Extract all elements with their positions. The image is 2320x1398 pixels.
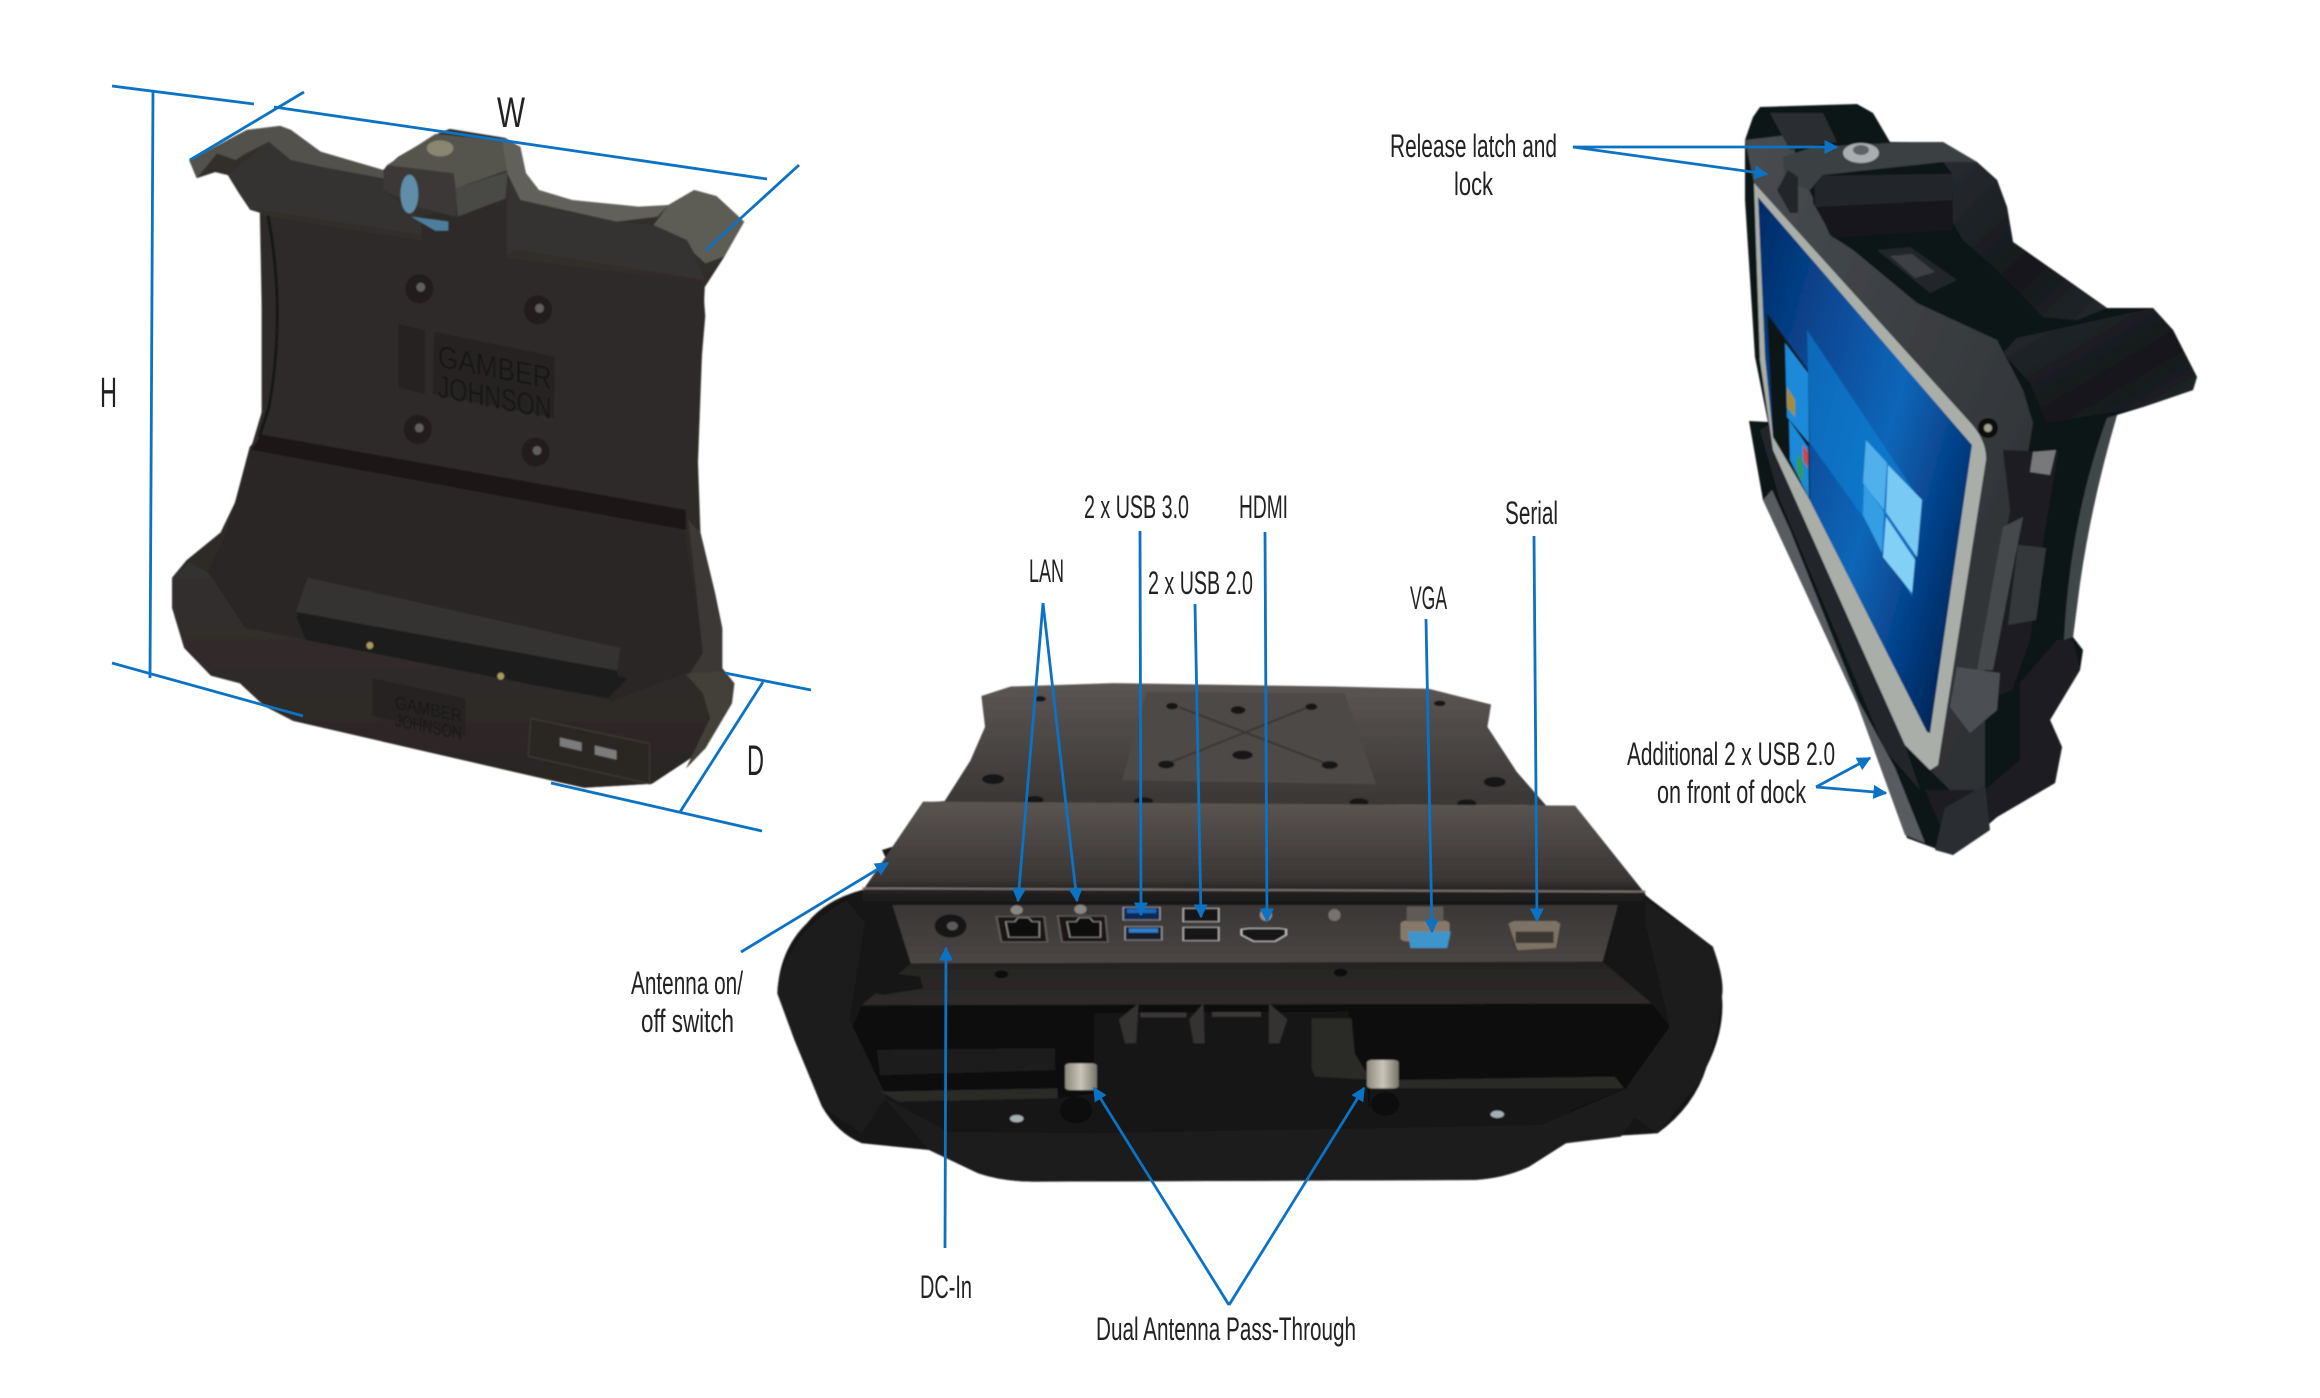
blue latch blade — [411, 217, 448, 231]
depth line — [680, 682, 763, 812]
center block side — [1312, 1018, 1367, 1079]
mounting screw highlight — [533, 446, 541, 455]
release latch text line 1: Release latch and — [1390, 128, 1557, 164]
lower front body — [883, 1088, 1639, 1182]
light beam — [1807, 330, 1920, 597]
HDMI port — [1241, 928, 1286, 941]
USB 3.0 text: 2 x USB 3.0 — [1084, 489, 1189, 525]
start tile photo — [1787, 387, 1795, 417]
rail inner — [1760, 425, 1920, 790]
back plate — [252, 216, 705, 515]
USB 3.0 bottom — [1125, 927, 1162, 940]
lower back wall — [208, 450, 703, 688]
tablet frame — [1745, 135, 2033, 790]
callout: antenna switch — [631, 863, 888, 1039]
corner screw core — [1984, 424, 1992, 432]
right grip — [2003, 308, 2197, 423]
side catch — [2008, 545, 2046, 625]
hinge latch — [1950, 667, 2000, 733]
corner screw — [1978, 418, 1998, 438]
release latch arrow 2 — [1573, 147, 1767, 174]
antenna switch text line 2: off switch — [641, 1003, 734, 1039]
keyboard latch label — [1890, 254, 1935, 278]
dimension label D: D — [747, 737, 764, 785]
tray interior — [853, 1004, 1670, 1113]
LAN jack 1 — [1006, 918, 1039, 937]
VESA hole — [1166, 703, 1178, 710]
mount hole top — [1034, 696, 1046, 702]
LAN jack 2 — [1067, 918, 1101, 937]
latch block top — [1783, 142, 1977, 190]
mounting screw highlight — [415, 423, 424, 432]
VGA connector — [1408, 932, 1451, 948]
right bay — [1370, 1088, 1624, 1123]
mounting screw highlight — [416, 283, 425, 292]
center antenna block — [1093, 1012, 1370, 1132]
connector notch — [1119, 1003, 1139, 1043]
logo line 1: GAMBER — [438, 338, 552, 396]
left tab surface — [189, 126, 384, 178]
USB 2.0 top — [1183, 908, 1219, 922]
keyboard latch — [1877, 247, 1957, 293]
left step — [880, 1088, 1058, 1102]
callout: Serial — [1505, 495, 1558, 921]
lock side face — [456, 172, 507, 217]
right post surface — [502, 138, 668, 222]
width line — [274, 107, 767, 179]
mounting screw — [522, 437, 550, 467]
front USB text line 2: on front of dock — [1657, 774, 1807, 810]
LAN arrow 2 — [1043, 603, 1077, 901]
VESA hole — [1322, 761, 1338, 769]
VGA glow — [1407, 907, 1443, 921]
LAN screw 1 — [1011, 905, 1023, 915]
plate groove — [259, 216, 277, 437]
left lobe shade — [777, 900, 886, 1133]
callout: USB 2.0 — [1148, 565, 1253, 917]
VGA text: VGA — [1410, 580, 1447, 616]
serial connector — [1508, 921, 1561, 951]
antenna connector left — [1065, 1063, 1097, 1090]
handle — [1943, 162, 2107, 320]
mounting screw — [524, 295, 552, 324]
lock front face — [384, 165, 458, 217]
screw right — [1491, 1111, 1504, 1118]
VGA arrow — [1426, 619, 1432, 932]
VESA plate — [1122, 692, 1376, 784]
dimension label W: W — [497, 89, 525, 137]
HDMI arrow — [1265, 532, 1267, 921]
pass-through arrow right — [1229, 1088, 1364, 1305]
block tab — [1212, 1012, 1261, 1017]
serial pins — [1516, 932, 1554, 943]
product: dock with dimensions — [172, 126, 744, 788]
mount hole — [1134, 797, 1153, 805]
release latch text line 2: lock — [1454, 166, 1494, 202]
upper mounting plate — [923, 683, 1546, 805]
connector notch — [1189, 1003, 1205, 1043]
callout: antenna pass-through — [1094, 1088, 1364, 1347]
tablet screen — [1758, 197, 1972, 733]
VESA hole — [1158, 761, 1174, 768]
right lobe shade — [1624, 900, 1723, 1133]
HDMI text: HDMI — [1239, 489, 1288, 525]
block tab — [1140, 1013, 1186, 1017]
mount hole — [1484, 777, 1506, 787]
logo plate — [433, 331, 555, 418]
mount hole — [1025, 796, 1044, 804]
mount hole — [982, 774, 1004, 784]
spare screw — [1328, 909, 1341, 921]
window pane bottom right — [1883, 517, 1915, 593]
side bar — [1977, 517, 2023, 670]
USB 2.0 bottom — [1183, 927, 1219, 941]
latch block front — [1813, 173, 1953, 238]
connector notch — [1269, 1003, 1287, 1043]
key lock core — [1853, 145, 1869, 155]
top bracket — [1770, 113, 1837, 150]
DC-In arrow — [945, 948, 946, 1248]
front logo text — [395, 692, 462, 744]
antenna switch text line 1: Antenna on/ — [631, 965, 743, 1001]
front USB panel — [528, 718, 650, 784]
front USB text line 1: Additional 2 x USB 2.0 — [1627, 736, 1835, 772]
port panel — [892, 905, 1618, 963]
antenna switch arrow — [741, 863, 888, 952]
mounting screw — [404, 415, 432, 444]
lock top face — [387, 134, 507, 188]
logo line 2: JOHNSON — [438, 369, 552, 426]
antenna switch — [882, 820, 926, 867]
window pane top left — [1863, 440, 1887, 510]
Serial arrow — [1534, 536, 1537, 921]
dock silhouette — [172, 126, 744, 788]
panel hole left — [995, 970, 1008, 978]
left bay — [899, 1093, 1094, 1128]
start tile green — [1797, 453, 1803, 483]
lower dock body — [1925, 640, 2080, 855]
upper mount plate group — [923, 683, 1546, 807]
post left — [1060, 1097, 1092, 1123]
VESA hole — [1231, 706, 1245, 714]
contact pin — [497, 673, 504, 680]
switch bracket — [856, 969, 923, 995]
logo mark plate — [398, 324, 425, 394]
tray floor — [296, 615, 628, 698]
depth line top right — [706, 165, 799, 250]
latch block highlight — [1815, 174, 1952, 207]
USB 3.0 bottom tongue — [1129, 928, 1158, 933]
Serial text: Serial — [1505, 495, 1558, 531]
callout: VGA — [1410, 580, 1447, 932]
left slot — [877, 1048, 1055, 1075]
USB 3.0 top tongue — [1127, 909, 1156, 913]
window pane top right — [1886, 465, 1922, 557]
start tile red — [1803, 445, 1808, 468]
pass-through arrow left — [1094, 1088, 1229, 1305]
side port column — [1985, 450, 2058, 700]
start tiles lower — [1789, 420, 1809, 498]
VGA shell — [1401, 921, 1450, 941]
screw left — [1010, 1115, 1023, 1122]
height line — [150, 91, 153, 678]
front USB port — [560, 738, 582, 751]
side cap — [686, 671, 734, 769]
antenna pass-through text: Dual Antenna Pass-Through — [1096, 1311, 1356, 1347]
VESA hole — [1232, 750, 1253, 759]
docking bar top — [296, 578, 620, 671]
window pane bottom left — [1863, 483, 1884, 553]
DC-In jack — [935, 914, 967, 938]
USB 3.0 top — [1123, 907, 1160, 920]
tray ledge — [862, 962, 1652, 1005]
LAN screw 2 — [1074, 905, 1087, 914]
key lock — [1843, 143, 1879, 163]
contact pin — [366, 642, 373, 649]
front USB port — [595, 746, 617, 760]
LAN arrow 1 — [1018, 603, 1043, 901]
logo text — [438, 338, 552, 426]
mount hole top right — [1434, 701, 1446, 706]
shelf groove — [250, 434, 686, 530]
lock centre block — [420, 200, 506, 258]
USB 3.0 arrow — [1140, 531, 1141, 915]
blue latch knob — [401, 175, 418, 213]
lower dock group — [777, 802, 1723, 1182]
dock main view — [172, 126, 744, 788]
dock rail highlight — [1763, 490, 1925, 843]
key barrel — [427, 140, 453, 156]
product: tablet in dock — [1745, 104, 2197, 855]
right side wall — [688, 520, 722, 676]
release latch arrow 1 — [1573, 146, 1837, 148]
docking bar front — [296, 612, 620, 688]
dimension lines — [112, 86, 811, 831]
start tiles upper — [1785, 343, 1809, 443]
lower dock front — [1935, 785, 1990, 855]
callout: front USB — [1627, 736, 1886, 810]
front USB arrow 1 — [1816, 758, 1870, 787]
USB 2.0 text: 2 x USB 2.0 — [1148, 565, 1253, 601]
port shelf — [862, 802, 1645, 905]
HDMI screw — [1260, 909, 1272, 921]
side QR label — [2030, 450, 2056, 475]
dock and tablet silhouette — [1745, 104, 2197, 855]
release latch — [1777, 170, 1798, 213]
product: dock rear view — [777, 683, 1723, 1182]
front USB arrow 2 — [1816, 787, 1886, 793]
right column highlight — [2064, 415, 2117, 640]
front logo line 2: JOHNSON — [395, 710, 462, 744]
mount hole — [1457, 799, 1476, 807]
callout: LAN — [1018, 553, 1077, 901]
LAN port 2 — [1058, 916, 1108, 942]
front logo line 1: GAMBER — [395, 692, 462, 726]
rail underside left — [228, 142, 422, 235]
panel hole right — [1334, 969, 1347, 977]
USB 2.0 arrow — [1195, 604, 1201, 917]
callout: release latch — [1390, 128, 1837, 202]
LAN port 1 — [997, 917, 1047, 942]
DC-In pin — [947, 922, 958, 930]
dimension label H: H — [100, 369, 117, 417]
start menu — [1767, 313, 1810, 500]
LAN text: LAN — [1029, 553, 1064, 589]
mounting screw highlight — [535, 304, 544, 313]
depth extension bottom — [551, 783, 762, 831]
rail underside right — [507, 173, 705, 280]
right tab — [654, 190, 744, 263]
right bay top — [1394, 1077, 1624, 1088]
shelf edge highlight — [862, 888, 1645, 892]
front lip — [172, 563, 710, 788]
lower body — [777, 890, 1722, 1182]
front logo plate — [372, 678, 465, 736]
antenna connector right — [1367, 1060, 1399, 1088]
dock top rail — [189, 126, 744, 280]
tablet bezel — [1754, 183, 1986, 770]
VESA hole — [1306, 703, 1317, 710]
VESA cross — [1165, 707, 1326, 765]
mounting screw — [405, 274, 433, 303]
post right — [1371, 1092, 1399, 1116]
DC-In text: DC-In — [920, 1269, 972, 1305]
depth extension top — [725, 673, 811, 690]
height extension top — [112, 86, 254, 104]
depth line top left — [190, 92, 304, 160]
height extension bottom — [112, 663, 303, 716]
mount hole — [1350, 798, 1369, 806]
